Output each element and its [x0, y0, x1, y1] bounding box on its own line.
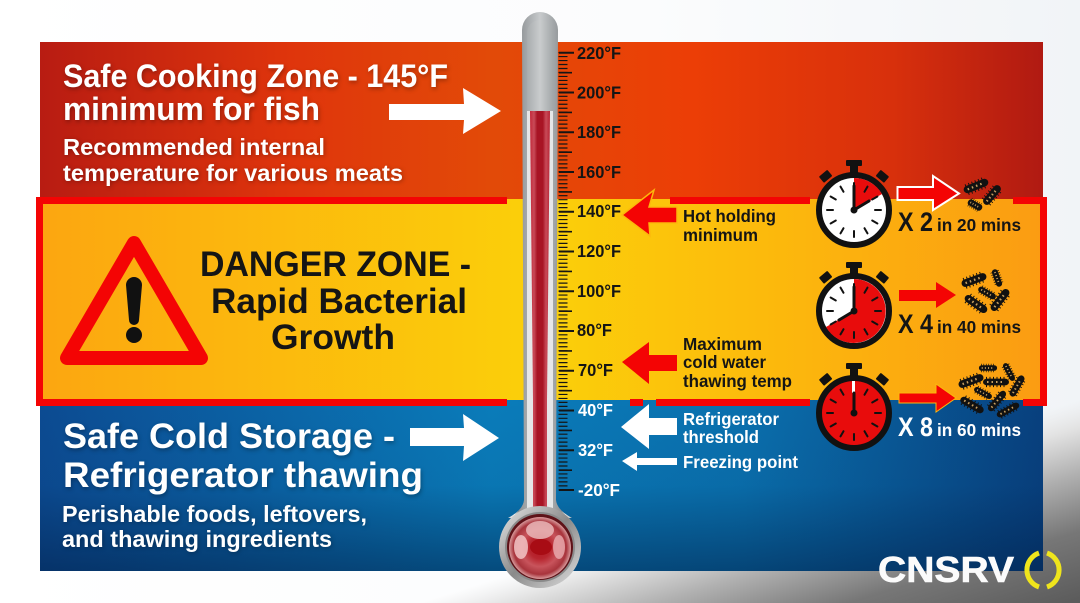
icon: bacteria x2: [967, 182, 998, 208]
thermometer tube: [508, 12, 572, 520]
temperature scale labels: 32°F: [578, 440, 613, 460]
callout: maximum cold water thawing: Maximum: [683, 334, 762, 354]
text: perishable foods: and thawing ingredients: [62, 526, 332, 552]
callout: maximum cold water thawing: cold water: [683, 352, 766, 372]
temperature scale labels: 160°F: [577, 162, 621, 182]
arrow: to safe cooking temperature: [389, 88, 501, 134]
callout: refrigerator threshold: [621, 404, 779, 449]
icon: stopwatch 20 minutes: [819, 160, 889, 245]
text: perishable foods: Perishable foods, leftovers,: [62, 501, 367, 527]
panel: safe cooking zone: [40, 42, 1043, 200]
arrow: freezing: [622, 452, 677, 471]
icon: warning triangle: [67, 243, 201, 358]
text: x2 in 20 mins: [898, 207, 1021, 237]
heading: safe cold storage: Safe Cold Storage -: [63, 417, 395, 456]
temperature scale labels: 80°F: [577, 320, 612, 340]
temperature scale labels: 100°F: [577, 281, 621, 301]
panel: safe cold storage: [40, 400, 1043, 571]
text: recommended temperature: temperature for various meats: [63, 160, 403, 186]
panel: danger zone: [36, 197, 1047, 406]
heading: safe cooking: minimum for fish: [63, 91, 320, 127]
heading: danger zone: Rapid Bacterial: [211, 282, 467, 321]
arrow: growth 1: [898, 176, 959, 210]
text: x4 in 40 mins: X 4: [898, 309, 933, 339]
arrow: to cold storage temperature: [410, 414, 499, 461]
text: x2 in 20 mins: X 2: [898, 207, 933, 237]
stopwatch row: x2 in 20 mins: [819, 160, 1021, 245]
text: x2 in 20 mins: in 20 mins: [937, 215, 1021, 235]
text: x4 in 40 mins: in 40 mins: [937, 317, 1021, 337]
temperature scale ticks: [563, 52, 566, 492]
icon: bacteria x8: [962, 365, 1022, 414]
arrow: maximum cold water: [622, 342, 677, 384]
callout: maximum cold water thawing: [622, 334, 792, 391]
temperature scale labels: 70°F: [578, 360, 613, 380]
thermometer: [499, 12, 621, 588]
icon: stopwatch 40 minutes: [819, 262, 889, 346]
arrow: growth 3: [899, 384, 956, 412]
icon: bacteria x4: [965, 271, 1006, 310]
text: recommended temperature: [63, 134, 403, 186]
logo: CNSRV: [878, 549, 1059, 590]
temperature scale labels: 140°F: [577, 201, 621, 221]
text: x8 in 60 mins: in 60 mins: [937, 420, 1021, 440]
callout: freezing point: Freezing point: [683, 452, 798, 472]
heading: safe cold storage: [63, 417, 423, 495]
text: recommended temperature: Recommended internal: [63, 134, 325, 160]
heading: danger zone: DANGER ZONE -: [200, 245, 471, 284]
heading: danger zone: Growth: [271, 318, 395, 357]
temperature scale labels: 180°F: [577, 122, 621, 142]
callout: refrigerator threshold: Refrigerator: [683, 409, 779, 429]
text: x8 in 60 mins: X 8: [898, 412, 933, 442]
temperature scale labels: 40°F: [578, 400, 613, 420]
arrow: growth 2: [899, 282, 956, 308]
text: x4 in 40 mins: [898, 309, 1021, 339]
heading: safe cooking: Safe Cooking Zone - 145°F: [63, 58, 448, 94]
temperature scale labels: 220°F: [577, 43, 621, 63]
callout: hot holding minimum: [622, 190, 776, 245]
thermometer bulb: [499, 506, 581, 588]
callout: refrigerator threshold: threshold: [683, 427, 759, 447]
heading: safe cold storage: Refrigerator thawing: [63, 456, 423, 495]
temperature scale labels: -20°F: [578, 480, 620, 500]
icon: stopwatch 60 minutes: [819, 363, 889, 448]
stopwatch row: x8 in 60 mins: [819, 363, 1022, 448]
temperature scale labels: 120°F: [577, 241, 621, 261]
stopwatch row: x4 in 40 mins: [819, 262, 1021, 346]
border: danger zone: [36, 197, 1047, 406]
callout: hot holding minimum: minimum: [683, 225, 758, 245]
arrow: hot holding: [622, 190, 677, 236]
callout: freezing point: [622, 452, 798, 472]
text: x8 in 60 mins: [898, 412, 1021, 442]
heading: danger zone: [200, 245, 471, 357]
callout: hot holding minimum: Hot holding: [683, 206, 776, 226]
arrow: refrigerator: [621, 404, 677, 449]
temperature scale labels: [577, 43, 621, 500]
temperature scale labels: 200°F: [577, 82, 621, 102]
logo: CNSRV: CNSRV: [878, 549, 1014, 590]
callout: maximum cold water thawing: thawing temp: [683, 371, 792, 391]
heading: safe cooking: [63, 58, 448, 127]
text: perishable foods: [62, 501, 367, 552]
